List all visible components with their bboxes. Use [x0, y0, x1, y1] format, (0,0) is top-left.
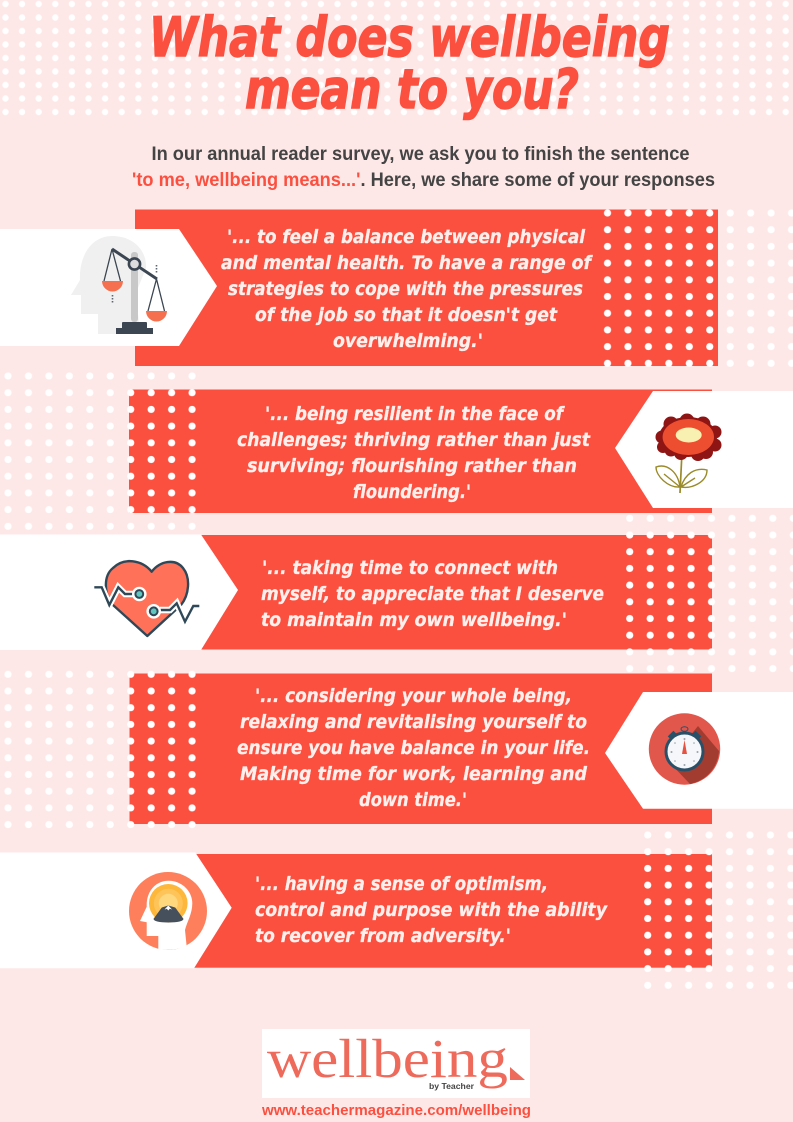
- quote text: Making time for work, learning and: [240, 763, 587, 785]
- logo: wellbeing by Teacher: by Teacher: [429, 1081, 475, 1091]
- panel: optimism: [0, 827, 793, 993]
- quote text: floundering.': [353, 481, 471, 503]
- panel: balance: [0, 205, 793, 371]
- title: mean to you?: [245, 58, 579, 121]
- panel: connection: [0, 510, 793, 676]
- quote text: [237, 685, 590, 811]
- logo: wellbeing by Teacher: wellbeing: [267, 1028, 508, 1089]
- quote text: strategies to cope with the pressures: [228, 278, 583, 300]
- quote text: relaxing and revitalising yourself to: [240, 711, 587, 733]
- quote text: [255, 873, 608, 947]
- quote text: '... taking time to connect with: [262, 557, 558, 579]
- icon: flower: [656, 414, 722, 493]
- quote text: to maintain my own wellbeing.': [261, 609, 567, 631]
- quote text: control and purpose with the ability: [255, 899, 608, 921]
- quote text: myself, to appreciate that I deserve: [261, 583, 604, 605]
- icon: stopwatch: [649, 713, 720, 785]
- website link: www.teachermagazine.com/wellbeing: [261, 1103, 531, 1119]
- quote text: '... to feel a balance between physical: [227, 226, 585, 248]
- intro text: [132, 144, 715, 191]
- quote text: down time.': [359, 789, 467, 811]
- intro text: In our annual reader survey, we ask you to finish the sentence: [152, 144, 690, 165]
- quote text: of the job so that it doesn't get: [255, 304, 558, 326]
- quote text: challenges; thriving rather than just: [237, 429, 591, 451]
- quote text: '... being resilient in the face of: [265, 403, 565, 425]
- intro text: 'to me, wellbeing means...'. Here, we share some of your responses: [132, 170, 715, 191]
- icon: scales and head: [71, 236, 167, 334]
- quote text: and mental health. To have a range of: [221, 252, 593, 274]
- quote text: ensure you have balance in your life.: [237, 737, 590, 759]
- title: What does wellbeing: [149, 6, 670, 69]
- panel: whole being: [0, 666, 793, 832]
- icon: heart with pulse: [94, 561, 199, 636]
- quote text: [237, 403, 591, 503]
- quote text: '... having a sense of optimism,: [255, 873, 548, 895]
- quote text: '... considering your whole being,: [255, 685, 572, 707]
- quote text: [261, 557, 604, 631]
- quote text: [221, 226, 593, 352]
- icon: head with sun and mountain: [129, 872, 207, 950]
- title: [149, 6, 670, 121]
- quote text: overwhelming.': [333, 330, 483, 352]
- quote text: surviving; flourishing rather than: [247, 455, 577, 477]
- quote text: to recover from adversity.': [255, 925, 511, 947]
- panel: resilience: [0, 368, 793, 534]
